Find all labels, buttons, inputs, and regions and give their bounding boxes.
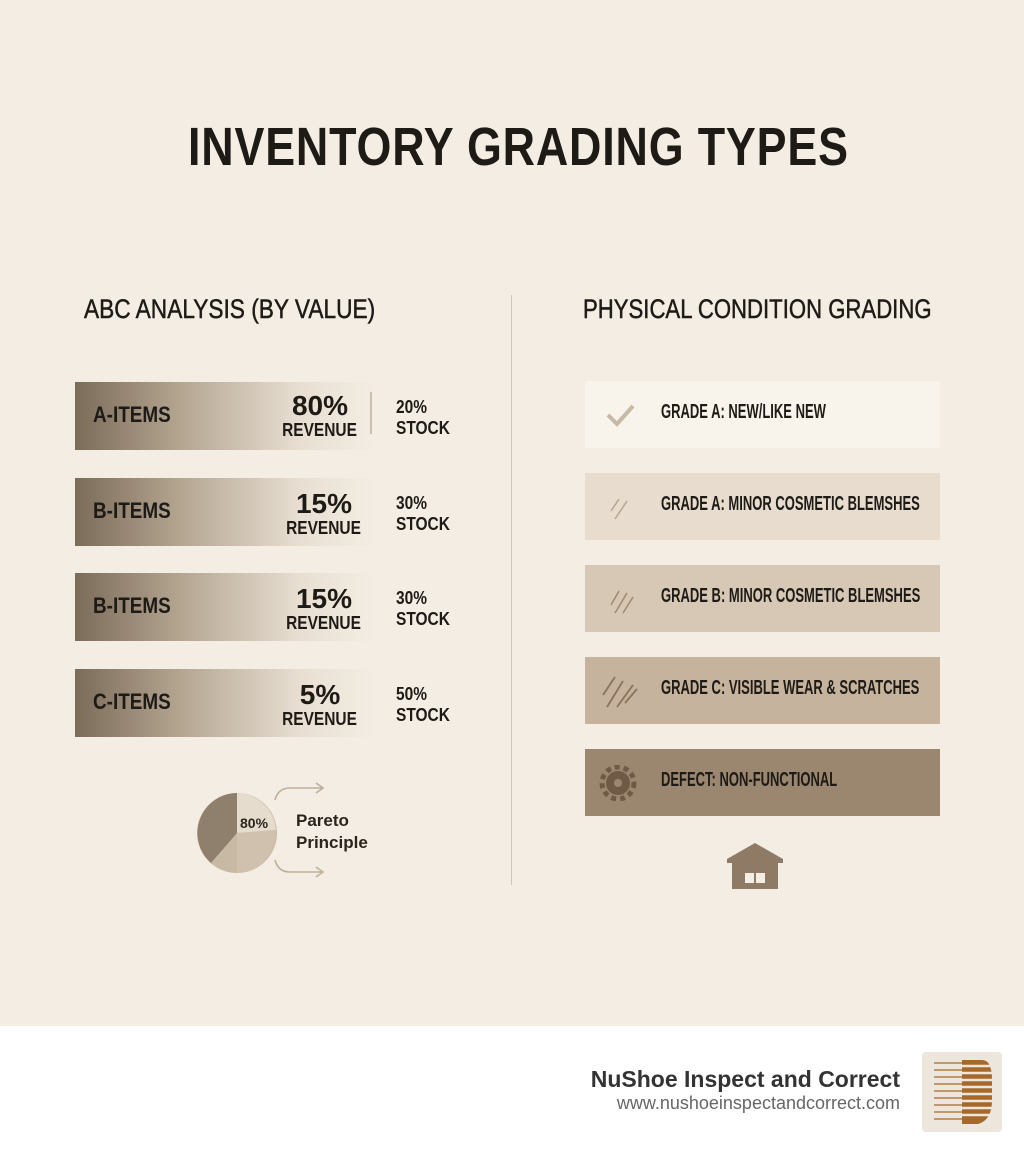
abc row A: 80%: [292, 390, 348, 421]
heading: physical condition: PHYSICAL CONDITION GRADING: [583, 294, 932, 324]
abc row C: STOCK: [396, 705, 450, 725]
brand text: NuShoe Inspect and Correct: [591, 1066, 900, 1092]
abc row B2: [75, 573, 450, 641]
abc row B: 15%: [296, 488, 352, 519]
grade A blemishes: GRADE A: MINOR COSMETIC BLEMSHES: [661, 493, 920, 515]
abc row C: [75, 669, 450, 737]
brand text: www.nushoeinspectandcorrect.com: [617, 1093, 900, 1113]
abc row A: STOCK: [396, 418, 450, 438]
brand text: [591, 1066, 900, 1113]
abc row B: 30%: [396, 493, 427, 513]
abc row B2: REVENUE: [287, 613, 361, 633]
heading: abc analysis: ABC ANALYSIS (BY VALUE): [84, 294, 375, 324]
grade C: [585, 657, 940, 724]
abc row B2: STOCK: [396, 609, 450, 629]
grade A blemishes: [585, 473, 940, 540]
abc row C: 50%: [396, 684, 427, 704]
title: INVENTORY GRADING TYPES: [188, 117, 849, 177]
abc row A: A-ITEMS: [93, 402, 171, 427]
grade A new: [585, 381, 940, 448]
pareto pie chart: 80%: [240, 815, 269, 831]
abc row B: STOCK: [396, 514, 450, 534]
abc row C: 5%: [300, 679, 340, 710]
abc row A: 20%: [396, 397, 427, 417]
defect: [585, 749, 940, 816]
footer: [0, 1026, 1024, 1154]
grade A new: GRADE A: NEW/LIKE NEW: [661, 401, 826, 423]
abc row B: REVENUE: [287, 518, 361, 538]
abc row C: C-ITEMS: [93, 689, 171, 714]
icon: warehouse: [727, 843, 783, 889]
abc row A: REVENUE: [283, 420, 357, 440]
grade B: GRADE B: MINOR COSMETIC BLEMSHES: [661, 585, 920, 607]
abc row B: [75, 478, 450, 546]
abc row B2: B-ITEMS: [93, 593, 171, 618]
pareto pie chart: [197, 782, 368, 878]
grade B: [585, 565, 940, 632]
abc row B2: 30%: [396, 588, 427, 608]
defect: DEFECT: NON-FUNCTIONAL: [661, 769, 837, 791]
logo: [922, 1052, 1002, 1132]
abc row B2: 15%: [296, 583, 352, 614]
abc row A: [75, 382, 450, 450]
grade C: GRADE C: VISIBLE WEAR & SCRATCHES: [661, 677, 919, 699]
pareto pie chart: Pareto: [296, 811, 349, 830]
abc row C: REVENUE: [283, 709, 357, 729]
abc row B: B-ITEMS: [93, 498, 171, 523]
pareto pie chart: Principle: [296, 833, 368, 852]
